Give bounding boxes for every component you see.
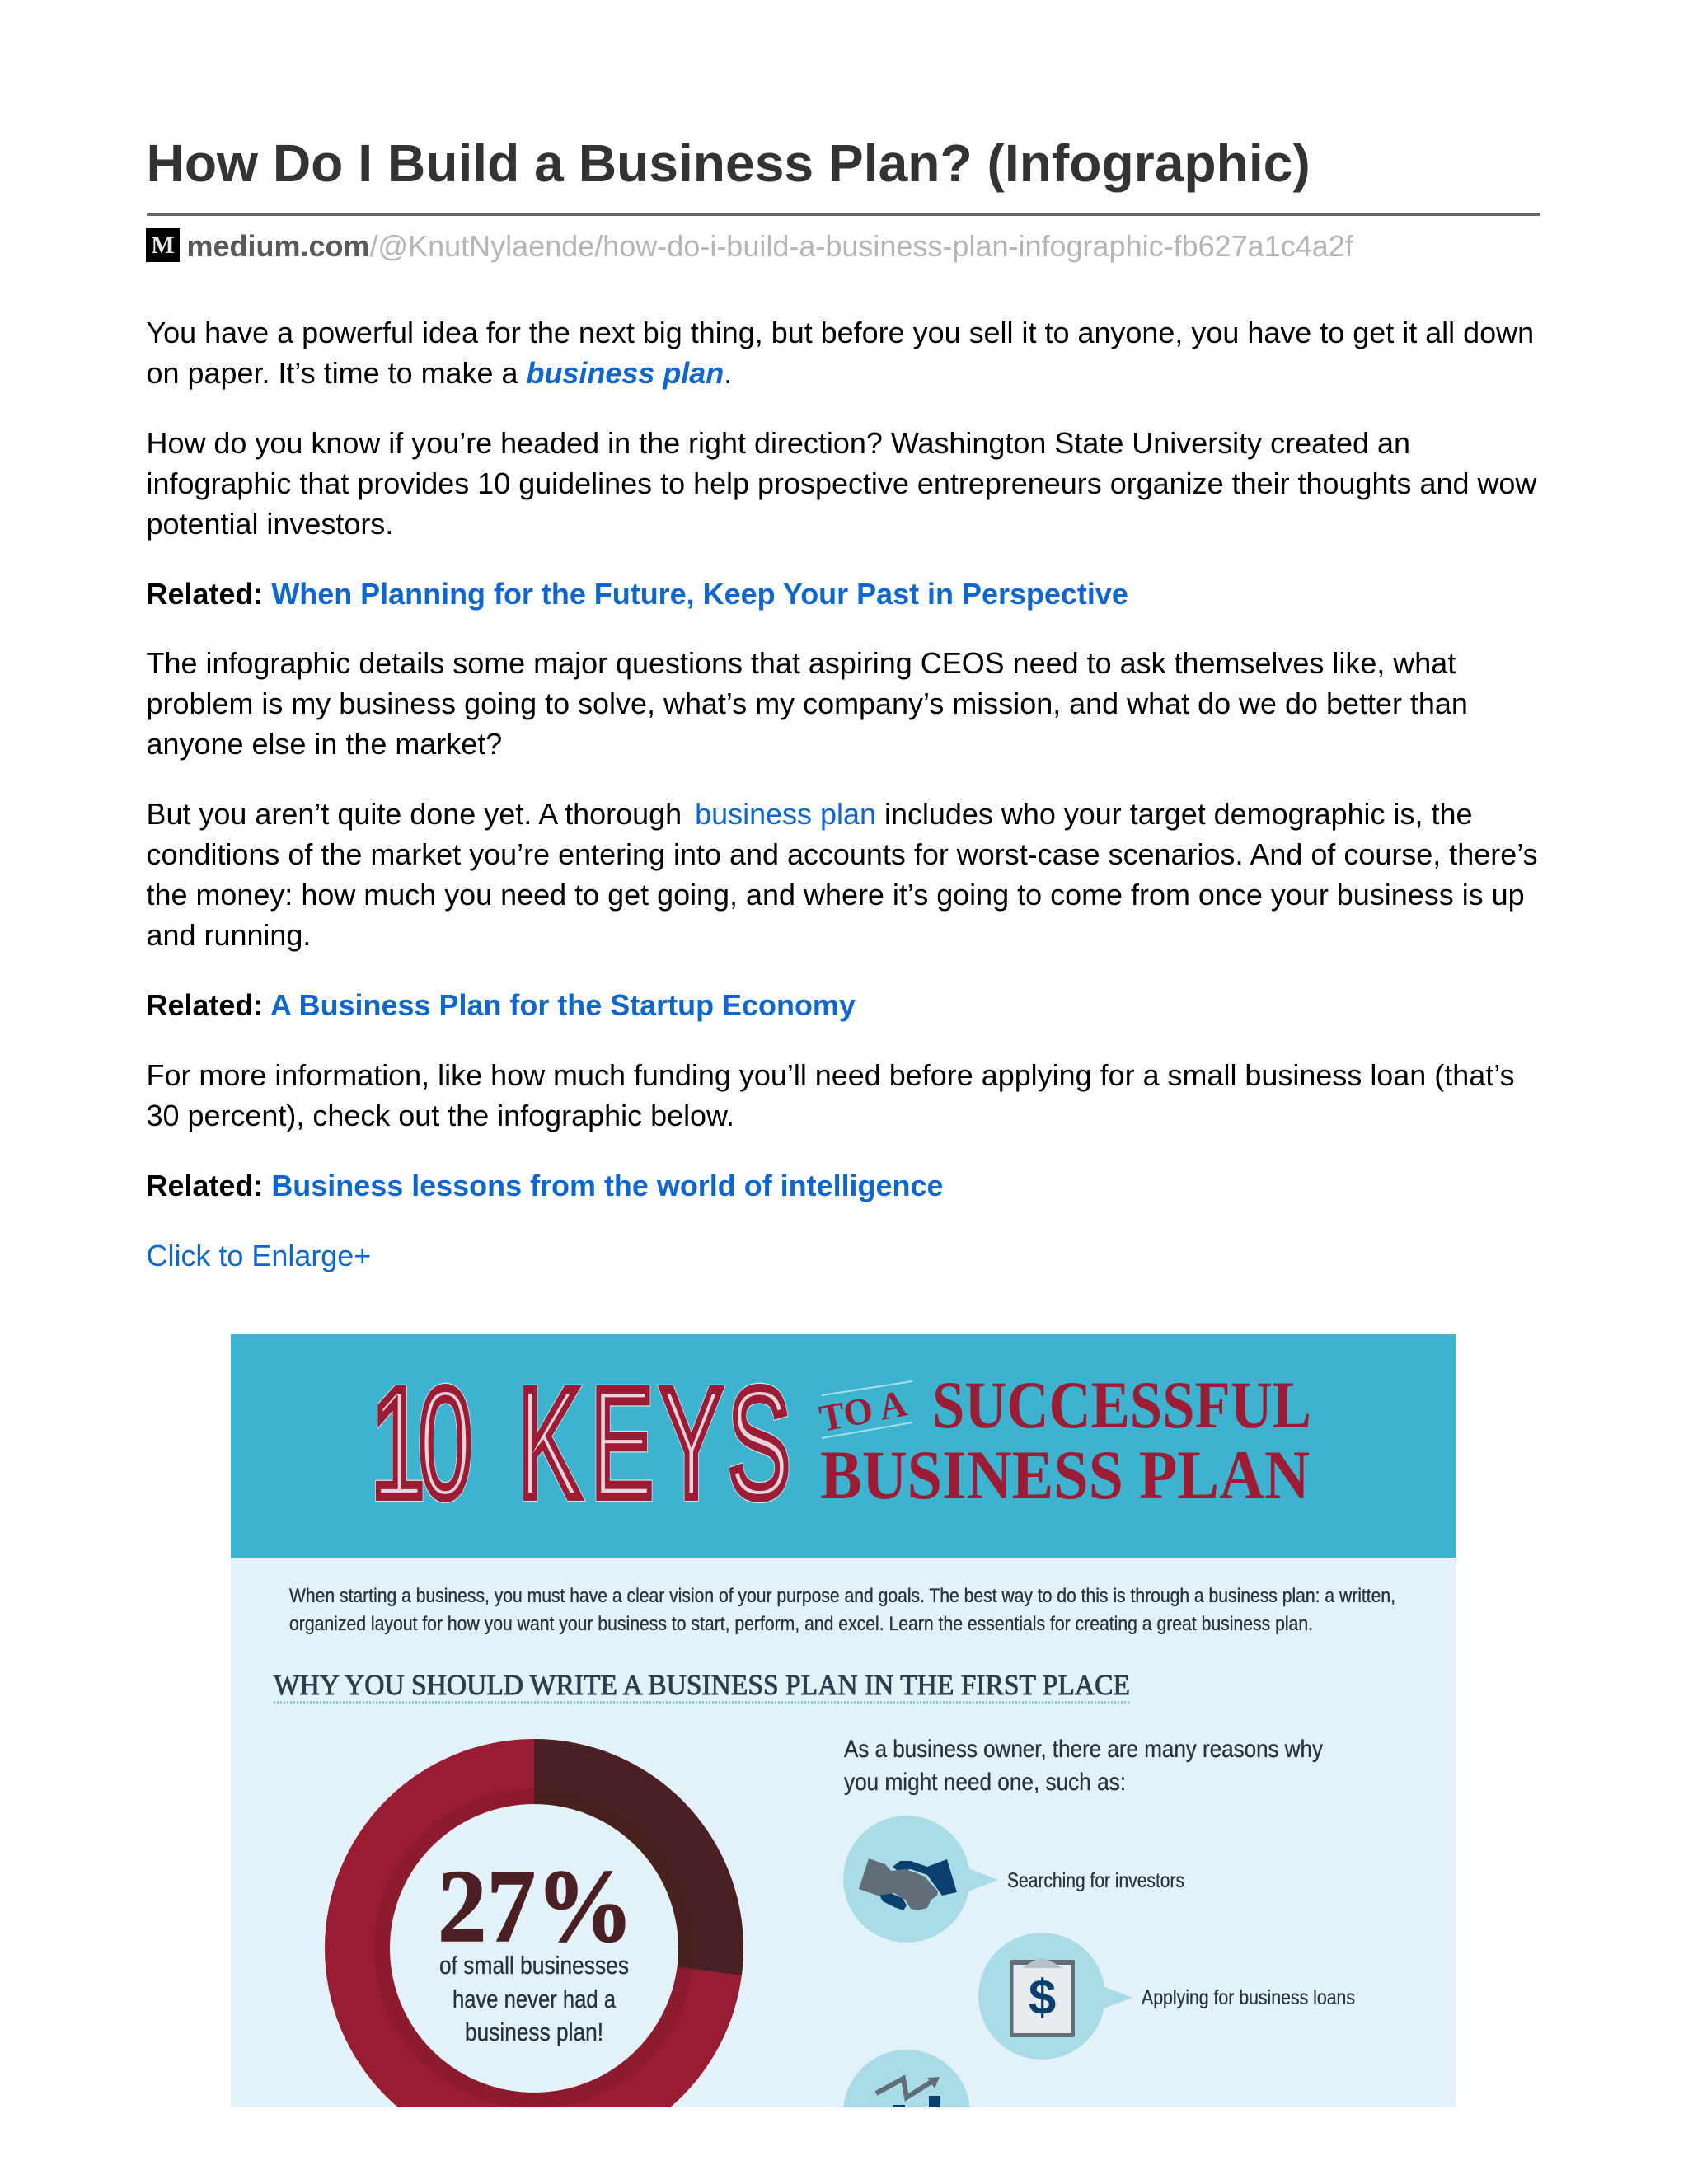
headline: 10 keys: 10 [371, 1357, 472, 1530]
icon: growth arrow [876, 2077, 940, 2112]
header band [231, 1334, 1456, 1558]
intro text: organized layout for how you want your business to start, perform, and excel. Learn the essentials for creating a great business plan. [289, 1613, 1313, 1635]
text: potential investors. [147, 507, 393, 541]
reason: searching for investors: Searching for investors [1007, 1869, 1184, 1892]
source url: medium.com/@KnutNylaende/how-do-i-build-a-business-plan-infographic-fb627a1c4a2f [186, 229, 1353, 263]
infographic panel [231, 1334, 1456, 2107]
donut chart: 27% [325, 1739, 743, 2107]
text: infographic that provides 10 guidelines to help prospective entrepreneurs organize their thoughts and wow [147, 466, 1536, 500]
related link 1: Related: When Planning for the Future, Keep Your Past in Perspective [147, 577, 1128, 611]
paragraph: thorough plan [147, 797, 1538, 952]
icon: clipboard [1010, 1957, 1075, 2037]
section heading: WHY YOU SHOULD WRITE A BUSINESS PLAN IN THE FIRST PLACE [274, 1669, 1130, 1701]
text: How do you know if you’re headed in the right direction? Washington State University created an [147, 426, 1410, 460]
donut caption: business plan! [465, 2018, 603, 2046]
headline: business plan: BUSINESS PLAN [820, 1436, 1310, 1514]
related link 3: Related: Business lessons from the world of intelligence [147, 1169, 943, 1202]
headline: 10 keys: KEYS [518, 1357, 790, 1530]
headline: to a: TO A [816, 1382, 910, 1440]
paragraph: major questions [147, 646, 1468, 761]
paragraph: more information [147, 1058, 1515, 1132]
reason: applying for business loans [978, 1933, 1355, 2060]
donut value: 27% [438, 1849, 634, 1964]
related link 2: Related: A Business Plan for the Startup Economy [147, 988, 856, 1022]
icon: medium logo: M [151, 232, 175, 259]
donut caption: of small businesses [439, 1951, 629, 1980]
light background [231, 1558, 1456, 2108]
text: 30 percent), check out the infographic below. [147, 1099, 734, 1132]
text: problem is my business going to solve, what’s my company’s mission, and what do we do better than [147, 687, 1468, 720]
headline: 10 keys [375, 1383, 790, 1503]
headline: successful: SUCCESSFUL [932, 1367, 1311, 1442]
reasons intro: you might need one, such as: [844, 1769, 1126, 1796]
donut caption: have never had a [452, 1985, 617, 2013]
intro text [289, 1585, 1395, 1635]
text: For more information, like how much funding you’ll need before applying for a small business loan (that’s [147, 1058, 1515, 1092]
reason: applying for business loans: Applying for business loans [1142, 1986, 1355, 2009]
reason: searching for investors [843, 1816, 1184, 1943]
text: on paper. It’s time to make a business plan. [147, 356, 732, 390]
text: conditions of the market you’re entering into and accounts for worst-case scenarios. And of course, there’s [147, 837, 1538, 871]
intro text: When starting a business, you must have a clear vision of your purpose and goals. The best way to do this is through a business plan: a written, [289, 1585, 1395, 1607]
icon: handshake [859, 1858, 957, 1910]
icon: clipboard: $ [1029, 1970, 1056, 2025]
text: You have a powerful idea for the next big thing, but before you sell it to anyone, you have to get it all down [147, 316, 1534, 349]
title rule [147, 213, 1540, 216]
text: the money: how much you need to get going, and where it’s going to come from once your business is up [147, 878, 1525, 912]
text: The infographic details some major questions that aspiring CEOS need to ask themselves like, what [147, 646, 1456, 680]
reason: growth chart (cropped) [843, 2050, 970, 2107]
icon: medium logo [146, 228, 180, 262]
paragraph: direction [147, 426, 1536, 541]
title: How Do I Build a Business Plan? (Infographic) [147, 134, 1311, 193]
headline: 10 keys: KEYS [518, 1357, 790, 1530]
paragraph: intro [147, 316, 1534, 390]
headline: 10 keys: 10 [371, 1357, 472, 1530]
text: But you aren’t quite done yet. A thorough business plan includes who your target demographic is, the [147, 797, 1472, 831]
reasons intro [844, 1736, 1323, 1796]
click to enlarge link: Click to Enlarge+ [147, 1239, 371, 1272]
reasons intro: As a business owner, there are many reasons why [844, 1736, 1323, 1763]
text: and running. [147, 918, 311, 952]
donut caption [439, 1951, 629, 2046]
text: anyone else in the market? [147, 727, 502, 761]
